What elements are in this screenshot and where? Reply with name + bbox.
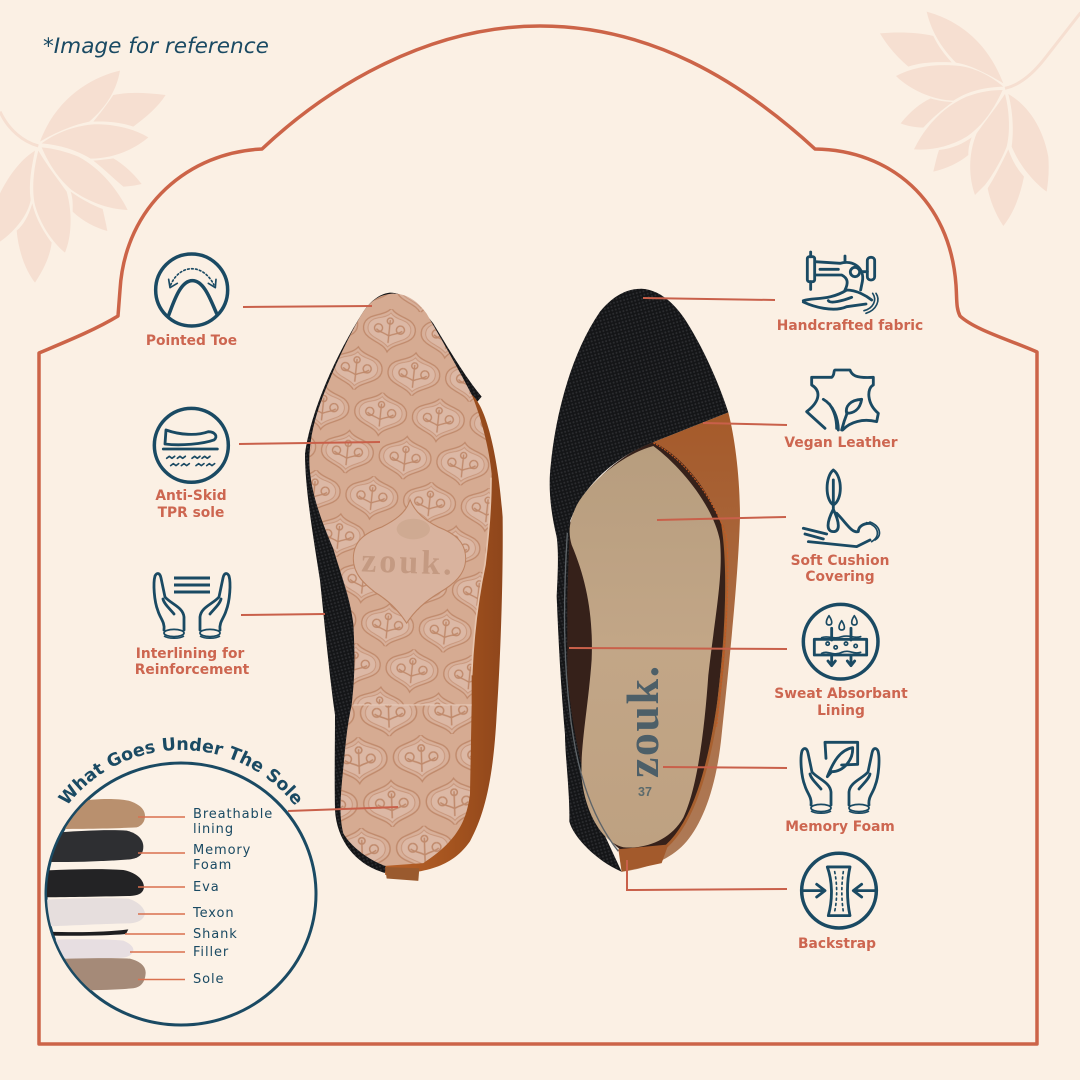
- icon: moisture through layer: [803, 604, 878, 679]
- icon: leather hide with leaf: [807, 370, 878, 430]
- layer: shank: [40, 929, 128, 936]
- reference note: *Image for reference: [43, 34, 269, 59]
- feature: vegan leather: [784, 370, 898, 451]
- layer: texon: [40, 898, 145, 927]
- label: Memory Foam: [785, 819, 895, 835]
- label: Lining: [817, 703, 865, 719]
- heading: curved title: What Goes Under The Sole: [58, 737, 300, 805]
- layer stack: [40, 799, 146, 990]
- insole brand text: zouk.: [617, 664, 668, 778]
- sole edge highlight: [472, 478, 491, 675]
- icon: hands and layers: [154, 574, 230, 638]
- label: [774, 686, 908, 719]
- layer labels: lining: [193, 822, 234, 837]
- panel: what goes under the sole: [44, 737, 318, 1026]
- label: [791, 553, 889, 585]
- arrow: under the sole: [288, 807, 398, 811]
- heel tread: [340, 705, 472, 866]
- backstrap tab: [618, 844, 668, 872]
- arrow: backstrap: [627, 860, 787, 890]
- label: Covering: [805, 569, 875, 585]
- label: Soft Cushion: [791, 553, 889, 569]
- arrow: handcrafted fabric: [643, 298, 775, 300]
- arrow: vegan leather: [703, 423, 787, 425]
- heel tab: [385, 867, 419, 881]
- feature: interlining: [135, 574, 250, 678]
- decorative lotus: top left: [0, 71, 166, 283]
- arrow: sweat lining: [569, 648, 787, 649]
- layer labels: Filler: [193, 945, 229, 960]
- layer labels: Sole: [193, 972, 224, 987]
- icon: compressed backstrap: [802, 853, 877, 928]
- patterned rubber sole: [309, 294, 492, 881]
- layer labels: Eva: [193, 880, 220, 895]
- label: Vegan Leather: [784, 435, 898, 451]
- layer labels: Texon: [192, 906, 234, 921]
- layer: sole: [64, 958, 146, 990]
- feature: soft cushion covering: [791, 470, 889, 585]
- label: Backstrap: [798, 936, 876, 952]
- layer labels: Shank: [193, 927, 238, 942]
- layer: memory foam: [51, 830, 144, 862]
- arrow: anti-skid sole: [239, 442, 380, 444]
- layer leader lines: [125, 817, 185, 980]
- insole size: 37: [638, 785, 652, 799]
- icon: shoe on ground: [154, 408, 228, 482]
- icon: feather over hand: [803, 470, 879, 547]
- layer: filler: [56, 939, 134, 959]
- arrow: memory foam: [663, 767, 787, 768]
- icon: pointed toe: [156, 254, 228, 326]
- heel seam: [353, 703, 472, 706]
- label: Reinforcement: [135, 662, 250, 678]
- feature: handcrafted fabric: [777, 252, 923, 334]
- sole logo text: zouk.: [361, 542, 455, 583]
- shoe: sole view: [305, 293, 503, 881]
- shoe opening: [565, 442, 727, 849]
- black knit upper: [550, 289, 728, 872]
- inner rim: [667, 525, 726, 846]
- arrow: pointed toe: [243, 306, 372, 307]
- feature: sweat absorbant lining: [774, 604, 908, 719]
- layer labels: Foam: [193, 858, 232, 873]
- layer labels: [192, 807, 273, 987]
- label: TPR sole: [158, 505, 224, 521]
- shoe: top view: [550, 289, 740, 872]
- grey lining rim: [565, 533, 618, 851]
- rim stitching: [653, 443, 728, 727]
- logo cartouche: [353, 499, 466, 623]
- feature: memory foam: [785, 742, 895, 835]
- icon: hands with pillow and feather: [801, 742, 879, 813]
- black fabric upper behind sole: [305, 293, 482, 873]
- label: Sweat Absorbant: [774, 686, 908, 702]
- leather vamp: [618, 412, 740, 872]
- label: Pointed Toe: [146, 333, 237, 349]
- feature: anti-skid sole: [154, 408, 228, 521]
- circle outline: [46, 763, 316, 1025]
- icon: sewing machine over hand: [803, 252, 878, 313]
- feature: backstrap: [798, 853, 877, 952]
- label: Anti-Skid: [155, 488, 227, 504]
- arrow: interlining: [241, 614, 325, 615]
- layer: eva: [40, 869, 144, 897]
- insole: [570, 446, 721, 848]
- label: [155, 488, 227, 521]
- feature: pointed toe: [146, 254, 237, 349]
- tan leather upper behind sole: [385, 395, 503, 875]
- layer labels: Breathable: [193, 807, 273, 822]
- label: Handcrafted fabric: [777, 318, 923, 334]
- label: [135, 646, 250, 678]
- decorative lotus: top right: [880, 12, 1080, 226]
- layer: breathable lining: [65, 799, 145, 829]
- forefoot tread: [309, 294, 492, 705]
- label: Interlining for: [136, 646, 244, 662]
- layer labels: Memory: [193, 843, 251, 858]
- leader lines: [239, 298, 787, 890]
- arrow: soft cushion: [657, 517, 786, 520]
